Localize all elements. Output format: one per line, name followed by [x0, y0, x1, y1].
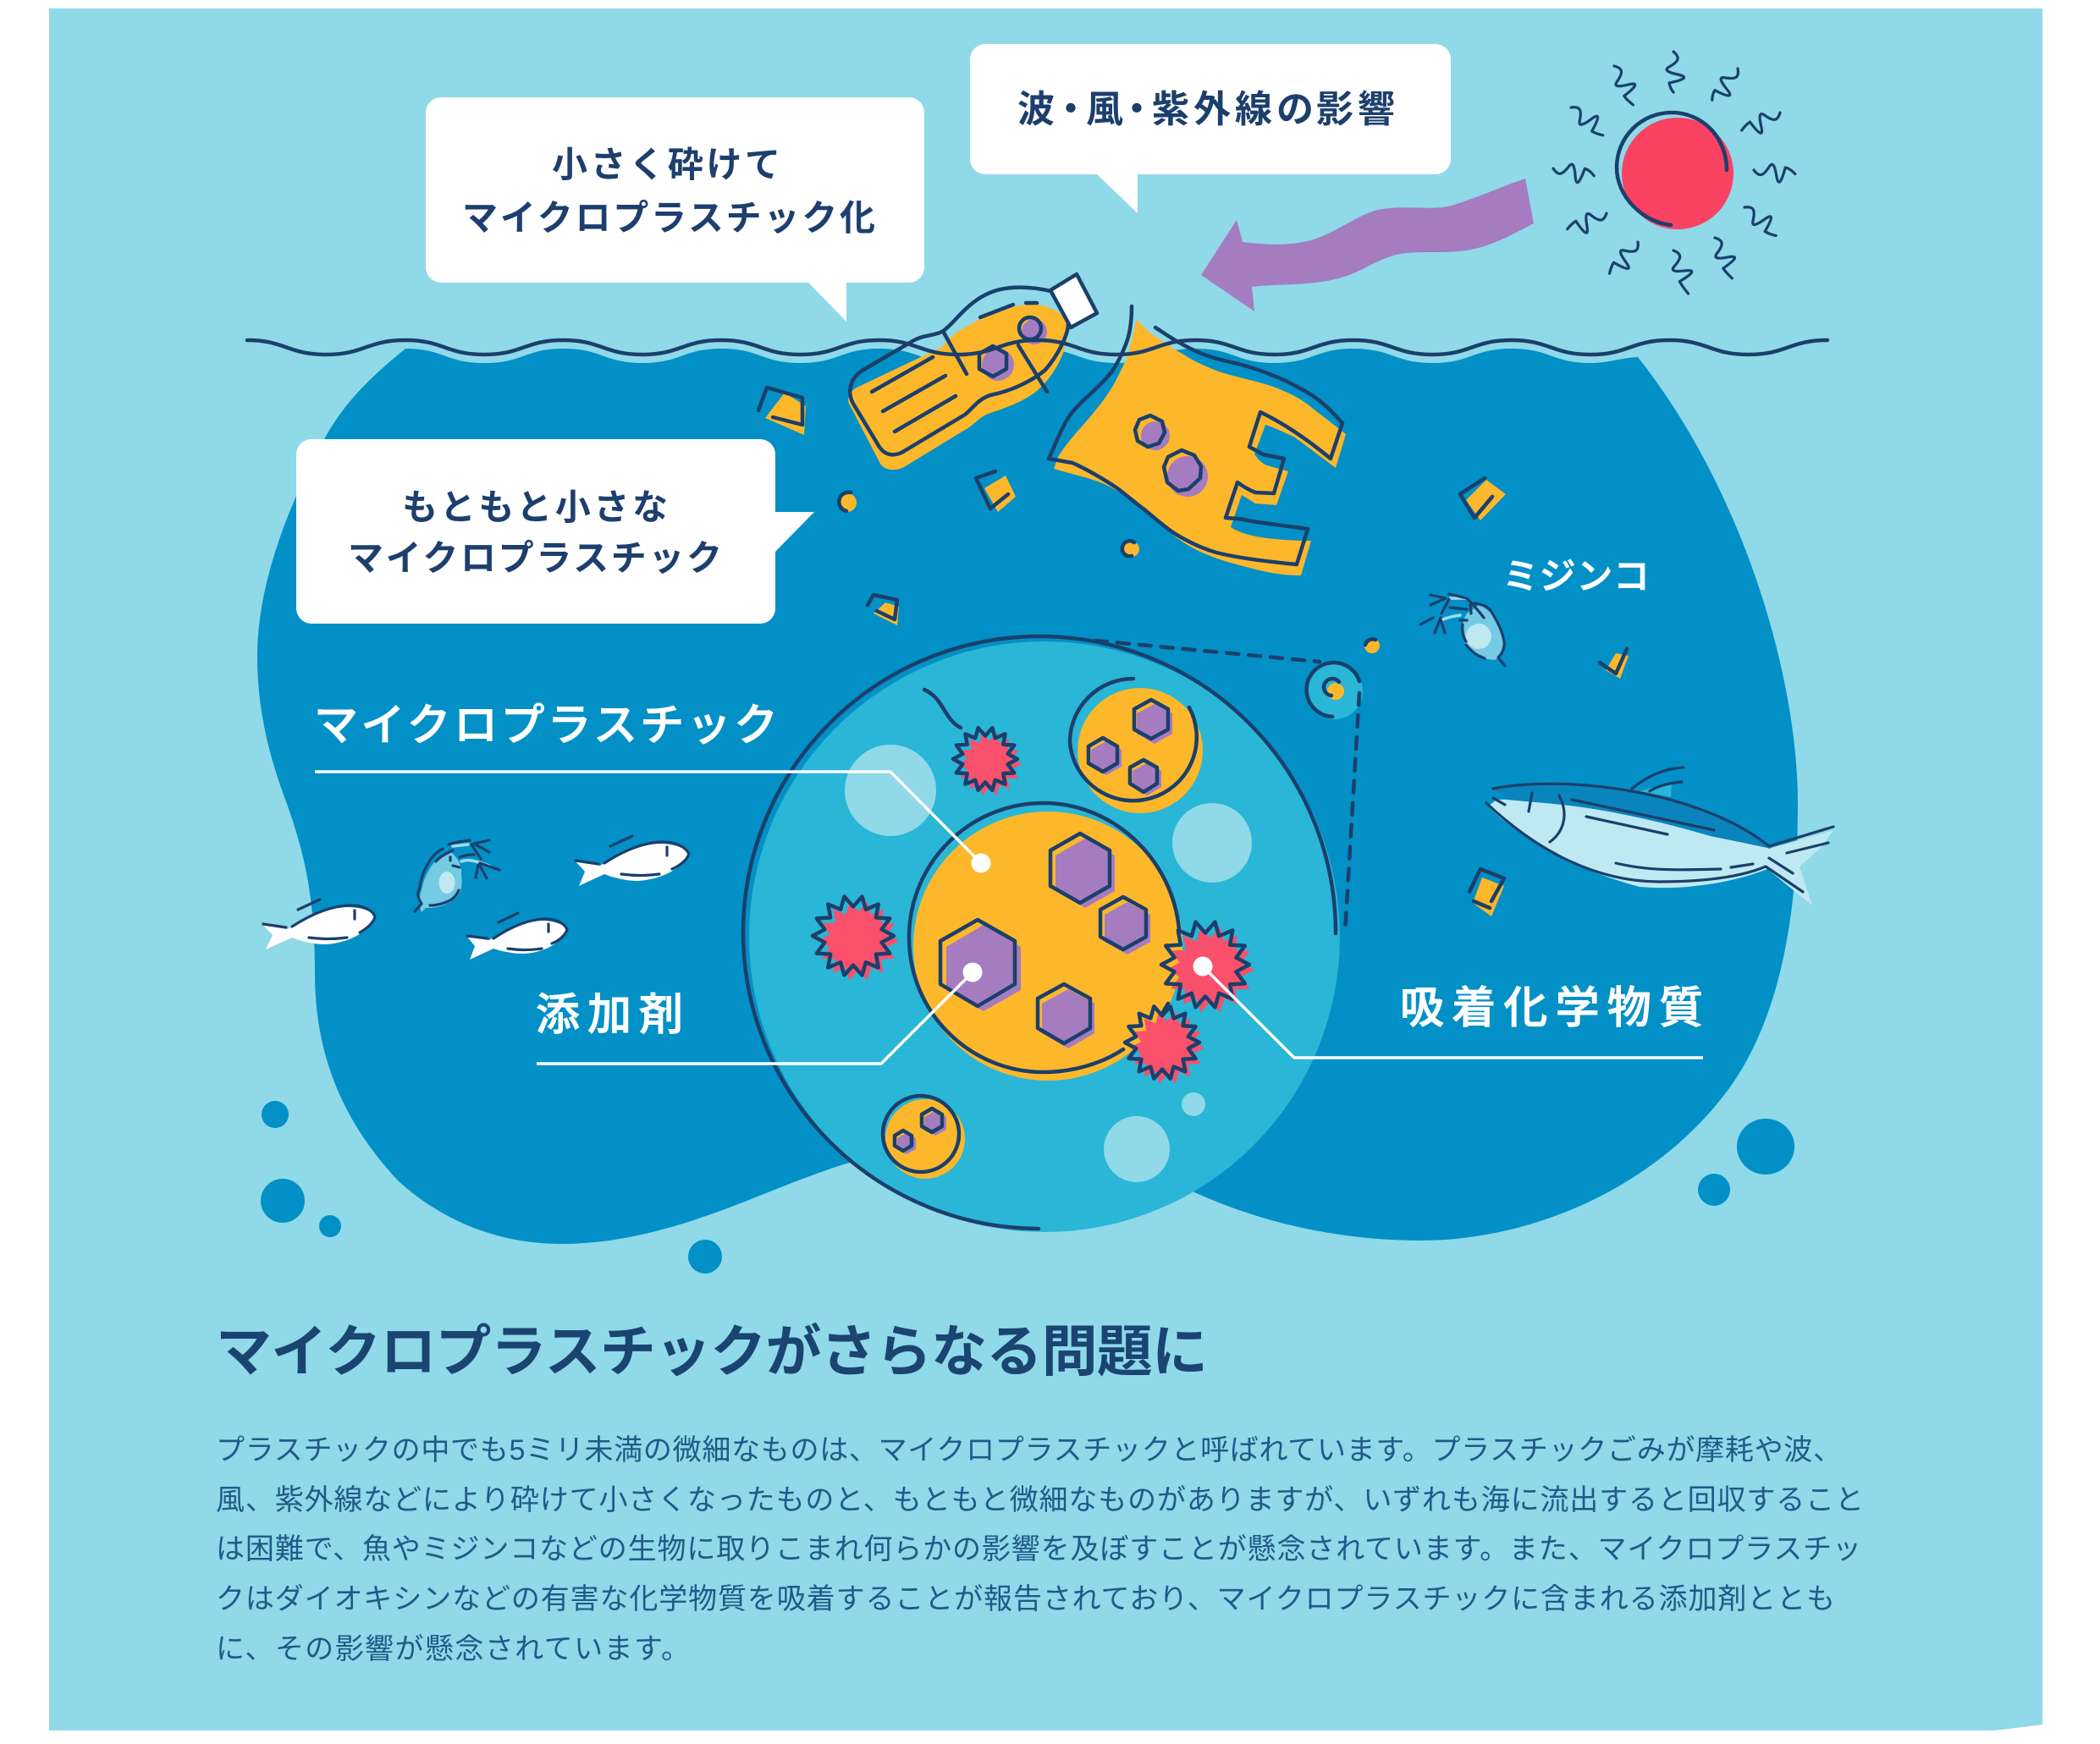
icon: water flea right	[1420, 594, 1505, 666]
bubbles around ocean	[261, 1101, 1794, 1274]
label: additive: 添加剤	[536, 991, 683, 1040]
magnifier outline and dashed guide	[743, 636, 1359, 1229]
icon: large fish	[1486, 767, 1833, 905]
body text: は困難で、魚やミジンコなどの生物に取りこまれ何らかの影響を及ぼすことが懸念されています。また、マイクロプラスチッ	[216, 1533, 1861, 1565]
microplastic large particle	[909, 803, 1182, 1081]
callout: waves, wind, UV	[970, 44, 1451, 213]
icon: small fish school	[263, 836, 689, 960]
heading: マイクロプラスチックがさらなる問題に	[216, 1320, 1208, 1383]
body text: プラスチックの中でも5ミリ未満の微細なものは、マイクロプラスチックと呼ばれています。プラスチックごみが摩耗や波、	[216, 1434, 1842, 1466]
fish 2	[576, 836, 689, 886]
body text: クはダイオキシンなどの有害な化学物質を吸着することが報告されており、マイクロプラスチックに含まれる添加剤ととも	[216, 1583, 1835, 1615]
callout: waves, wind, UV: 波・風・紫外線の影響	[1017, 89, 1395, 130]
callout: breaks into microplastics: 小さく砕けて	[552, 145, 780, 184]
icon: plastic bottle	[848, 274, 1097, 470]
callout: breaks into microplastics: マイクロプラスチック化	[462, 198, 875, 238]
leader: microplastic	[315, 772, 990, 873]
microplastic small particle	[883, 1096, 965, 1179]
callout: breaks into microplastics	[426, 97, 924, 322]
callout: originally small microplastics: マイクロプラスチック	[348, 538, 722, 578]
label: adsorbed chemicals: 吸着化学物質	[1400, 984, 1703, 1033]
body text	[216, 1434, 1864, 1665]
magnified circle	[749, 641, 1340, 1232]
leader: adsorbed chemicals	[1193, 956, 1703, 1058]
arrow: purple from sun	[1201, 179, 1534, 311]
small magnification source circle	[1307, 663, 1363, 719]
pale bubbles inside circle	[845, 745, 1252, 1182]
label: microplastic: マイクロプラスチック	[314, 701, 778, 751]
fish 1	[263, 900, 375, 949]
water surface wave line	[247, 340, 1827, 355]
fish 3	[467, 913, 567, 960]
ocean body	[257, 349, 1798, 1244]
leader: additive	[537, 963, 982, 1064]
body text: 風、紫外線などにより砕けて小さくなったものと、もともと微細なものがありますが、いずれも海に流出すると回収すること	[216, 1484, 1864, 1516]
callout: originally small microplastics: もともと小さな	[402, 487, 668, 527]
label: water flea: ミジンコ	[1502, 557, 1650, 597]
icon: plastic bag	[1049, 306, 1346, 575]
body text: に、その影響が懸念されています。	[216, 1633, 690, 1665]
microplastic medium particle	[1070, 679, 1203, 813]
callout: originally small microplastics	[296, 439, 814, 624]
icon: sun	[1552, 52, 1795, 296]
debris: microplastic fragments	[758, 388, 1629, 916]
adsorbed chemical stars	[813, 690, 1254, 1084]
icon: water flea left	[415, 840, 499, 912]
